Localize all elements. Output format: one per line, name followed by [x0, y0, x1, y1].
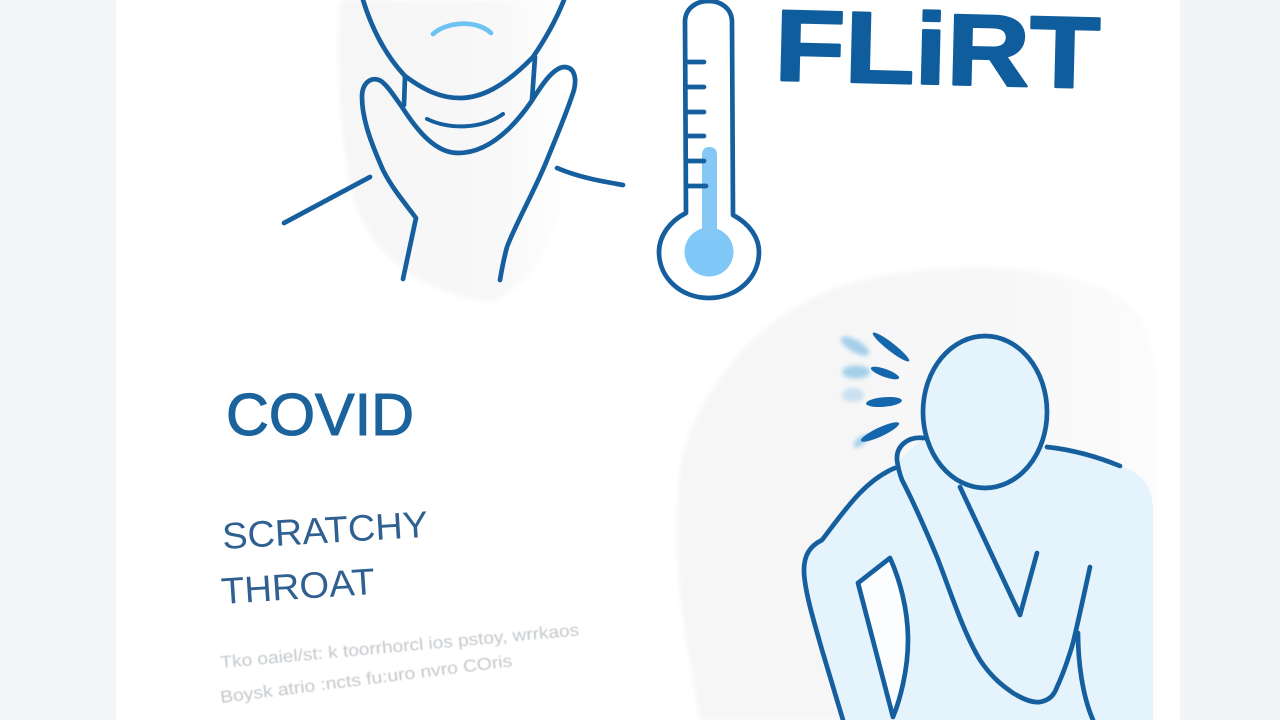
text block: caption: [219, 620, 580, 707]
heading: COVID: COVID: [226, 382, 414, 448]
line: THROAT: THROAT: [220, 561, 376, 612]
arm gap outline: [858, 558, 908, 717]
panel: left margin: [0, 0, 116, 720]
inner arm V: [960, 487, 1037, 615]
icon: thermometer: [659, 1, 759, 298]
dark droplets: [859, 330, 912, 445]
pale droplets: [838, 333, 872, 450]
icon: coughing person: [804, 336, 1120, 720]
panel: right margin: [1180, 0, 1280, 720]
back and left arm: [804, 468, 895, 720]
panel: neck illustration backdrop: [338, 0, 570, 302]
illustration: body fill: [804, 438, 1153, 720]
icon: cough droplets: [838, 330, 912, 450]
icon: person with sore throat: [284, 0, 623, 280]
mercury bulb: [684, 228, 734, 276]
throat crease: [427, 114, 503, 126]
caption line 2: Boysk atrio :ncts fu:uro nvro COris: [219, 651, 513, 707]
right neck line: [532, 57, 535, 100]
mercury column: [702, 147, 717, 240]
right shoulder: [557, 168, 623, 185]
thermometer outline: [659, 1, 759, 298]
head: [923, 336, 1047, 488]
right shoulder: [1047, 447, 1120, 466]
hands around neck: [362, 67, 575, 280]
raised hand and forearm: [897, 438, 1090, 702]
mouth: [433, 24, 491, 34]
line: SCRATCHY: SCRATCHY: [221, 504, 429, 557]
torso side: [1078, 633, 1093, 720]
heading: scratchy throat: [220, 504, 429, 612]
panel: coughing person backdrop: [677, 268, 1155, 720]
illustration: gap between arm and torso: [858, 558, 908, 720]
left neck line: [404, 77, 405, 105]
caption line 1: Tko oaiel/st: k toorrhorcl ios pstoy, wrrkaos: [220, 620, 580, 672]
scale ticks: [687, 62, 706, 186]
face outline: [363, 0, 564, 98]
left shoulder: [284, 177, 370, 223]
